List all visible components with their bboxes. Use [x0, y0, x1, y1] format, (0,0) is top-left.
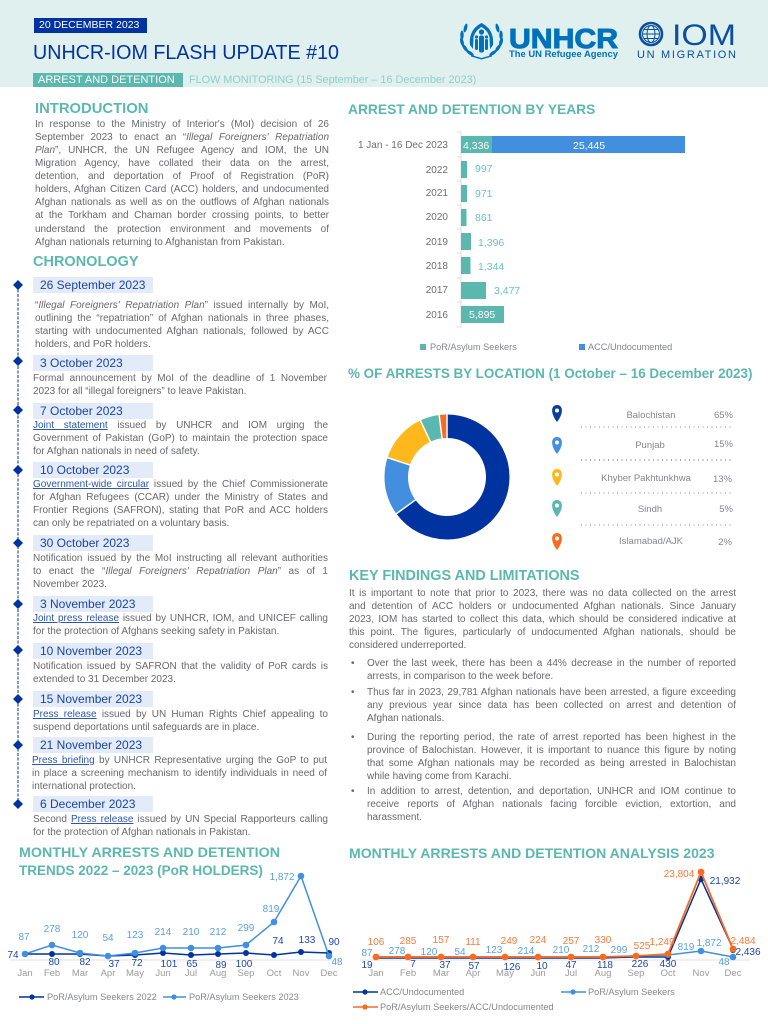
bar chart: arrests by year [358, 132, 685, 352]
bar chart: arrests by year: 2021 [426, 188, 448, 199]
logo: IOM: UN MIGRATION [637, 49, 736, 61]
text: 26 September: “Illegal Foreigners' Repatriation Plan” issued internally by MoI, [35, 300, 329, 310]
bar chart: arrests by year: 1,396 [478, 237, 504, 249]
line chart: monthly trends PoR: 1,872 [269, 872, 295, 883]
text: 7 October [33, 420, 328, 457]
line chart: monthly analysis 2023: 278 [389, 946, 406, 957]
line chart: monthly analysis 2023: 525 [634, 941, 651, 952]
text: key findings intro: considered underreported. [349, 640, 466, 651]
line chart: monthly analysis 2023: 87 [361, 948, 373, 959]
bullet: evictions: receive reports of Afghan nationals facing forcible eviction, extortion, and [367, 799, 736, 810]
line chart: monthly analysis 2023: Sep [628, 968, 644, 979]
line chart: monthly analysis 2023: 430 [660, 959, 677, 970]
bullet: evictions: • [351, 786, 355, 797]
line chart: monthly trends PoR: Dec [321, 968, 338, 979]
text: 21 November: Press briefing by UNHCR Representative urging the GoP to put [32, 754, 327, 766]
line chart: monthly analysis 2023: 111 [465, 937, 481, 948]
line chart: monthly analysis 2023: Jul [565, 968, 577, 979]
heading: key findings: KEY FINDINGS AND LIMITATIONS [349, 568, 580, 584]
logo: UNHCR [460, 23, 619, 60]
bullet: total arrests: Thus far in 2023, 29,781 Afghan nationals have been arrested, a figure exceeding [367, 686, 736, 698]
text: key findings intro [349, 588, 736, 651]
line chart: monthly analysis 2023: 157 [433, 935, 450, 946]
line chart: monthly analysis 2023: PoR/Asylum Seekers [588, 987, 675, 997]
heading: chronology: CHRONOLOGY [33, 254, 139, 270]
legend: locations: Sindh [638, 504, 662, 515]
line chart: monthly analysis 2023: 214 [518, 946, 535, 957]
line chart: monthly analysis 2023: Mar [433, 968, 449, 979]
text: 6 December [33, 814, 328, 838]
text: 26 September: starting with undocumented Afghan nationals, followed by ACC [35, 326, 329, 337]
bar chart: arrests by year: 2018 [426, 261, 448, 272]
text: 15 November: suspend deportations until safeguards are in place. [33, 722, 259, 733]
text: key findings intro: It is important to note that prior to 2023, there was no data collected on the arrest [349, 588, 736, 598]
date: 15 November 2023: 15 November 2023 [40, 692, 142, 706]
line chart: monthly analysis 2023: 118 [597, 960, 613, 971]
bar chart: arrests by year: 997 [475, 163, 493, 175]
date: 6 December 2023 [33, 796, 153, 812]
line chart: monthly trends PoR: Jul [185, 968, 197, 979]
line chart: monthly trends PoR: Nov [293, 968, 310, 979]
line chart: monthly trends PoR: 123 [127, 930, 144, 941]
text: 3 October: 2023 for all “illegal foreigners” to leave Pakistan. [33, 386, 246, 397]
line chart: monthly analysis 2023: 19 [361, 960, 373, 971]
bar chart: arrests by year: 4,336 [463, 140, 489, 152]
bullet: Balochistan: while having come from Karachi. [367, 771, 512, 782]
text: 10 October: Frontier Regions (SAFRON), stating that PoR and ACC holders [33, 505, 328, 516]
line chart: monthly trends PoR: Oct [267, 968, 282, 979]
line chart: monthly trends PoR: 101 [161, 959, 178, 970]
line chart: monthly trends PoR: Apr [101, 968, 115, 979]
text: 6 December: for the protection of Afghan nationals in Pakistan. [33, 827, 250, 838]
text: 10 November: Notification issued by SAFRON that the validity of PoR cards is [33, 661, 328, 672]
text: 30 October: to enact the “Illegal Foreigners' Repatriation Plan” as of 1 [33, 566, 328, 577]
text: 10 October: Government-wide circular issued by the Chief Commissionerate [33, 479, 328, 490]
text: 30 October: Notification issued by the MoI instructing all relevant authorities [33, 552, 328, 564]
text: 10 November: extended to 31 December 2023. [33, 674, 176, 685]
line chart: monthly analysis 2023: 299 [611, 945, 628, 956]
line chart: monthly analysis 2023 [353, 868, 761, 1012]
line chart: monthly analysis 2023: 37 [439, 960, 451, 971]
text: introduction: detention, and deportation of Proof of Registration (PoR) [35, 171, 329, 182]
text: introduction: Afghan nationals returning to Afghanistan from Pakistan. [35, 237, 285, 248]
line chart: monthly trends PoR: 133 [299, 935, 316, 946]
line chart: monthly analysis 2023: 23,804 [664, 869, 695, 880]
line chart: monthly analysis 2023: 54 [454, 947, 466, 958]
bar chart: arrests by year: 3,477 [494, 285, 520, 297]
heading: arrest and detention by years: ARREST AND DETENTION BY YEARS [348, 102, 595, 117]
bullet: total arrests: • [351, 686, 355, 698]
line chart: monthly analysis 2023: 1,872 [696, 938, 722, 949]
text: 3 October [33, 372, 327, 397]
text: introduction: understand the protection environment and movements of [35, 224, 329, 235]
line chart: monthly analysis 2023: Feb [400, 968, 416, 979]
line chart: monthly trends PoR: 74 [272, 936, 284, 947]
text: 10 October: for Afghan Refugees (CCAR) under the Ministry of States and [33, 492, 328, 503]
legend: locations: 15% [714, 439, 734, 450]
line chart: monthly trends PoR: Aug [210, 968, 226, 979]
bullet: weekly decrease: • [351, 658, 355, 668]
text: 21 November: in place a screening mechanism to identify individuals in need of [32, 768, 327, 779]
line chart: monthly analysis 2023: 330 [595, 935, 612, 946]
text: introduction [35, 118, 330, 248]
bullet: evictions: harassment. [367, 812, 422, 823]
bullet: weekly decrease: Over the last week, there has been a 44% decrease in the number of reported [367, 658, 736, 668]
date: 10 October 2023: 10 October 2023 [40, 463, 129, 477]
text: introduction: Plan”, UNHCR, the UN Refugee Agency and IOM, the UN [35, 145, 329, 156]
line chart: monthly analysis 2023: 126 [504, 962, 521, 973]
bar chart: arrests by year: 2019 [426, 237, 448, 248]
line chart: monthly analysis 2023: 226 [632, 959, 649, 970]
legend: locations: Khyber Pakhtunkhwa [601, 473, 692, 484]
bullet: weekly decrease [351, 658, 736, 682]
date: 3 October 2023: 3 October 2023 [40, 356, 123, 370]
line chart: monthly trends PoR: May [126, 968, 144, 979]
line chart: monthly trends PoR: Sep [238, 968, 254, 979]
line chart: monthly analysis 2023: 123 [486, 945, 503, 956]
heading: introduction: INTRODUCTION [35, 101, 148, 117]
bullet: total arrests [351, 686, 736, 724]
date: 30 October 2023 [33, 535, 153, 551]
text: 3 October: Formal announcement by MoI of the deadline of 1 November [33, 372, 327, 384]
text: 30 October: November 2023. [33, 579, 107, 590]
bar chart: arrests by year: 861 [475, 212, 493, 224]
logo: UNHCR: UNHCR [509, 23, 618, 54]
text: introduction: at the Torkham and Chaman border crossing points, to better [35, 210, 329, 221]
line chart: monthly analysis 2023: Jan [368, 968, 384, 979]
line chart: monthly analysis 2023: 106 [368, 937, 385, 948]
line chart: monthly analysis 2023: 1,249 [649, 937, 675, 948]
bar chart: arrests by year: 2020 [426, 212, 448, 223]
bar chart: arrests by year: PoR/Asylum Seekers [430, 342, 517, 352]
text: 6 December: Second Press release issued by UN Special Rapporteurs calling [33, 814, 328, 825]
line chart: monthly trends PoR: Jun [155, 968, 171, 979]
line chart: monthly trends PoR: 87 [18, 932, 30, 943]
text: introduction: September 2023 to enact an “Illegal Foreigners' Repatriation [35, 132, 329, 143]
bullet: Balochistan: province of Balochistan. However, it is important to nuance this figure by noting [367, 745, 736, 756]
line chart: monthly analysis 2023: Nov [693, 968, 710, 979]
line chart: monthly trends PoR: PoR/Asylum Seekers 2023 [189, 992, 299, 1002]
bullet: Balochistan [351, 732, 736, 782]
text: 15 November [33, 709, 328, 733]
text: introduction: Afghan nationals as well as on the outflows of Afghan nationals [35, 197, 329, 208]
line chart: monthly trends PoR: 65 [186, 959, 198, 970]
bar chart: arrests by year: 2016 [426, 310, 448, 321]
bar chart: arrests by year: 971 [475, 188, 493, 200]
line chart: monthly trends PoR: 72 [131, 958, 143, 969]
line chart: monthly analysis 2023: 47 [565, 960, 577, 971]
text: 7 October: Joint statement issued by UNHCR and IOM urging the [33, 420, 328, 430]
line chart: monthly analysis 2023: Aug [595, 968, 611, 979]
line chart: monthly analysis 2023: 48 [718, 957, 730, 968]
legend: locations: 5% [719, 504, 734, 515]
line chart: monthly analysis 2023: 257 [563, 936, 580, 947]
heading: monthly trends [19, 845, 280, 878]
timeline [13, 280, 23, 809]
bullet: evictions: In addition to arrest, detention, and deportation, UNHCR and IOM continue to [367, 786, 736, 797]
line chart: monthly trends PoR: 210 [183, 927, 200, 938]
line chart: monthly analysis 2023: ACC/Undocumented [380, 987, 464, 997]
line chart: monthly trends PoR: 299 [238, 923, 255, 934]
text: key findings intro: 2023, IOM has started to collect this data, which should be considered indicative at [349, 614, 736, 625]
date: 7 October 2023: 7 October 2023 [40, 404, 123, 418]
text: 26 September [35, 300, 329, 350]
line chart: monthly trends PoR: 100 [236, 959, 253, 970]
logo: IOM: IOM [672, 19, 736, 52]
text: 21 November [32, 754, 328, 792]
line chart: monthly trends PoR: 74 [7, 950, 19, 961]
bullet: total arrests: Afghan nationals. [367, 713, 444, 724]
text: 7 October: Government of Pakistan (GoP) to maintain the protection space [33, 433, 328, 444]
heading: percent of arrests by location: % OF ARRESTS BY LOCATION (1 October – 16 December 2023) [348, 366, 752, 381]
date: 7 October 2023 [33, 403, 153, 419]
line chart: monthly trends PoR: Feb [44, 968, 60, 979]
line chart: monthly analysis 2023: Jun [530, 968, 546, 979]
logo: IOM [637, 19, 736, 61]
date: 3 November 2023: 3 November 2023 [40, 597, 135, 611]
text: 10 October [33, 479, 328, 529]
line chart: monthly analysis 2023: 7 [410, 959, 416, 970]
line chart: monthly trends PoR: 819 [263, 904, 280, 915]
line chart: monthly trends PoR: 89 [215, 960, 227, 971]
text: key findings intro: this point. The figures, particularly of undocumented Afghan nationals, should be [349, 627, 736, 638]
legend: locations: 65% [714, 410, 734, 421]
date: 6 December 2023: 6 December 2023 [40, 797, 135, 811]
text: 26 September: outlining the “repatriation” of Afghan nationals in three phases, [35, 313, 329, 324]
line chart: monthly analysis 2023: 2,436 [735, 947, 761, 958]
line chart: monthly analysis 2023: 819 [678, 942, 695, 953]
bullet: weekly decrease: arrests, in comparison to the week before. [367, 671, 553, 682]
heading: monthly analysis: MONTHLY ARRESTS AND DETENTION ANALYSIS 2023 [349, 845, 715, 861]
legend: locations: Punjab [635, 440, 665, 451]
line chart: monthly trends PoR: 48 [331, 957, 343, 968]
title: UNHCR-IOM FLASH UPDATE #10 [33, 42, 339, 64]
bullet: Balochistan: • [351, 732, 355, 742]
line chart: monthly analysis 2023: Oct [661, 968, 676, 979]
bar chart: arrests by year: 1,344 [478, 261, 504, 273]
date: 3 October 2023 [33, 355, 153, 371]
line chart: monthly trends PoR: 80 [48, 957, 60, 968]
bullet: total arrests: any previous year since data has been collected on arrest and detention of [367, 700, 736, 711]
heading: monthly trends: MONTHLY ARRESTS AND DETENTION [19, 845, 280, 861]
line chart: monthly analysis 2023: 120 [421, 947, 438, 958]
line chart: monthly trends PoR: Mar [72, 968, 88, 979]
bar chart: arrests by year: 1 Jan - 16 Dec 2023 [358, 140, 448, 151]
legend: locations: 13% [713, 474, 733, 485]
text: introduction: In response to the Ministry of Interior's (MoI) decision of 26 [35, 118, 329, 130]
subtitle period: FLOW MONITORING (15 September – 16 December 2023) [189, 74, 476, 86]
line chart: monthly analysis 2023: 57 [468, 961, 480, 972]
text: 3 November: for the protection of Afghans seeking safety in Pakistan. [33, 626, 279, 637]
line chart: monthly analysis 2023: 210 [553, 945, 570, 956]
line chart: monthly analysis 2023: 224 [530, 935, 547, 946]
line chart: monthly trends PoR: 214 [155, 927, 172, 938]
line chart: monthly trends PoR [7, 872, 343, 1002]
line chart: monthly trends PoR: 54 [102, 933, 114, 944]
text: introduction: Migration Agency, have collated their data on the arrest, [35, 158, 329, 169]
date: 3 November 2023 [33, 596, 153, 612]
line chart: monthly analysis 2023: May [496, 968, 514, 979]
text: key findings intro: and detention of ACC holders or undocumented Afghan nationals. Since January [349, 601, 736, 612]
line chart: monthly trends PoR: 212 [210, 927, 227, 938]
bullet: evictions [351, 786, 736, 823]
date: 10 November 2023: 10 November 2023 [40, 644, 142, 658]
line chart: monthly trends PoR: Jan [17, 968, 33, 979]
header band [0, 0, 768, 87]
text: 15 November: Press release issued by UN Human Rights Chief appealing to [33, 709, 328, 720]
line chart: monthly trends PoR: PoR/Asylum Seekers 2022 [47, 992, 157, 1002]
text: 21 November: international protection. [32, 781, 136, 792]
text: 10 November [33, 661, 328, 685]
legend: locations: 2% [718, 537, 733, 548]
text: 26 September: holders, and PoR holders. [35, 339, 151, 350]
date: 10 October 2023 [33, 462, 153, 478]
legend: locations: Islamabad/AJK [619, 536, 684, 547]
line chart: monthly analysis 2023: 285 [400, 936, 417, 947]
bar chart: arrests by year: 5,895 [469, 309, 495, 321]
text: 10 October: can only be repatriated on a voluntary basis. [33, 518, 229, 529]
line chart: monthly analysis 2023: 21,932 [710, 876, 741, 887]
line chart: monthly analysis 2023: Apr [466, 968, 480, 979]
date: 30 October 2023: 30 October 2023 [40, 536, 129, 550]
line chart: monthly analysis 2023: 212 [583, 944, 600, 955]
line chart: monthly analysis 2023: 10 [536, 961, 548, 972]
logo: UNHCR: The UN Refugee Agency [509, 49, 619, 60]
text: 3 November [33, 613, 328, 637]
line chart: monthly trends PoR: 37 [108, 959, 120, 970]
line chart: monthly analysis 2023: 249 [501, 936, 518, 947]
donut chart [384, 414, 510, 540]
text: 3 November: Joint press release issued by UNHCR, IOM, and UNICEF calling [33, 613, 328, 624]
line chart: monthly trends PoR: 120 [72, 930, 89, 941]
line chart: monthly analysis 2023: 2,484 [730, 936, 756, 947]
subtitle tag: ARREST AND DETENTION [38, 74, 175, 86]
legend: locations [552, 405, 734, 550]
legend: locations: Balochistan [626, 410, 676, 421]
date: 26 September 2023: 26 September 2023 [40, 278, 145, 292]
line chart: monthly trends PoR: 90 [328, 937, 340, 948]
line chart: monthly trends PoR: 82 [79, 957, 91, 968]
line chart: monthly analysis 2023: PoR/Asylum Seekers/ACC/Undocumented [380, 1002, 554, 1012]
text: 7 October: for Afghan nationals in need of safety. [33, 446, 200, 457]
bar chart: arrests by year: 25,445 [573, 140, 605, 152]
text: 30 October [33, 552, 328, 590]
line chart: monthly analysis 2023: Dec [725, 968, 742, 979]
heading: monthly trends: TRENDS 2022 – 2023 (PoR HOLDERS) [19, 863, 263, 878]
bar chart: arrests by year: 2022 [426, 165, 448, 176]
bullet: Balochistan: that some Afghan nationals may be recorded as being arrested in Balochistan [367, 758, 736, 769]
bar chart: arrests by year: ACC/Undocumented [588, 342, 672, 352]
bullet: Balochistan: During the reporting period, the rate of arrest reported has been highest in the [367, 732, 736, 742]
line chart: monthly trends PoR: 278 [44, 924, 61, 935]
date: 21 November 2023: 21 November 2023 [40, 738, 142, 752]
bar chart: arrests by year: 2017 [426, 285, 448, 296]
text: introduction: holders, Afghan Citizen Card (ACC) holders, and undocumented [35, 184, 329, 195]
date badge: 20 DECEMBER 2023 [39, 19, 139, 31]
